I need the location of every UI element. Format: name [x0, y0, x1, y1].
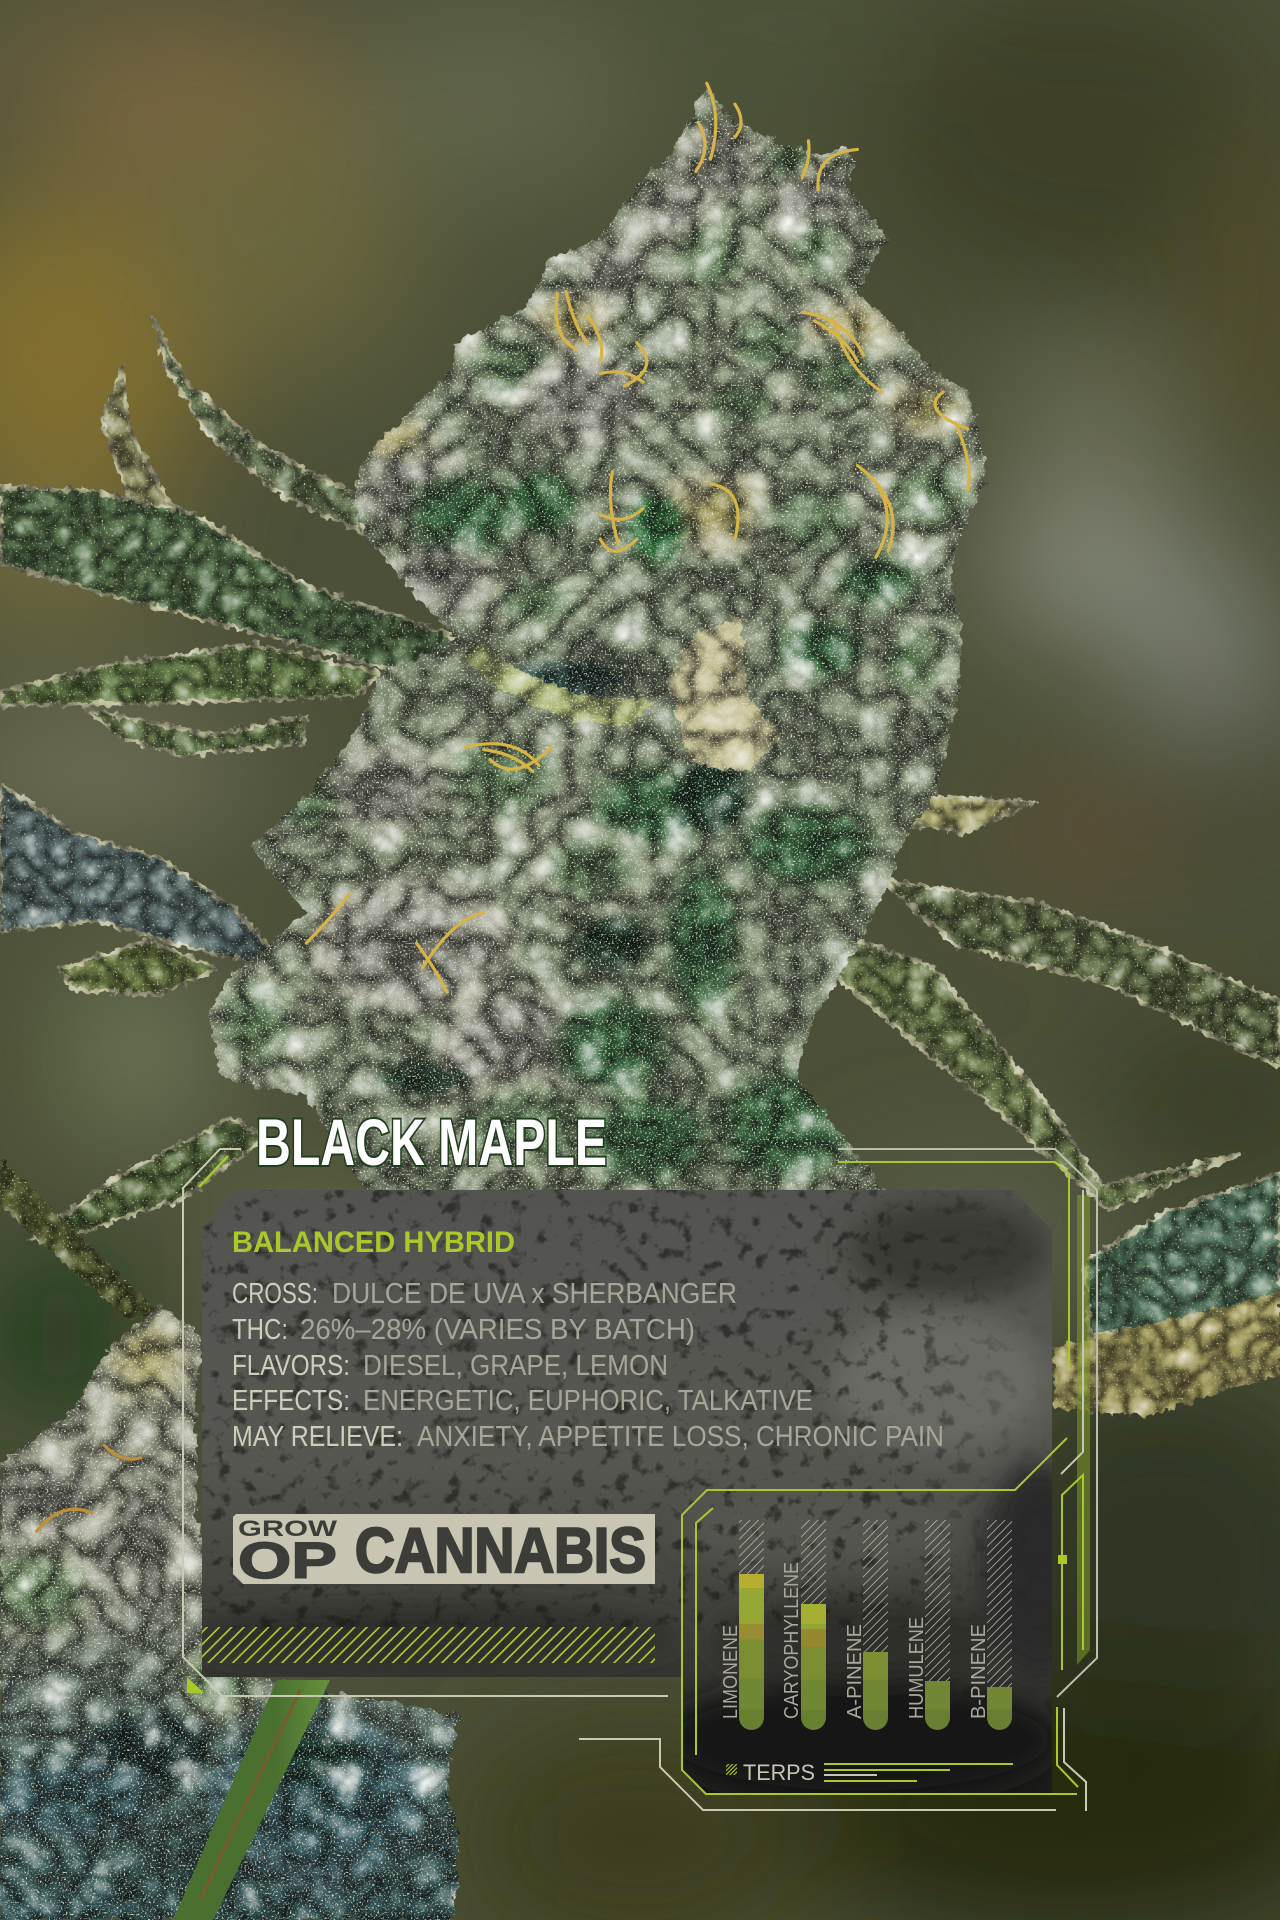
spec: flavors: DIESEL, GRAPE, LEMON — [363, 1350, 668, 1382]
strain name title: BLACK MAPLE — [256, 1105, 607, 1179]
bud: soft calyx tones — [206, 125, 984, 1188]
leaf: dark left blue — [0, 784, 288, 968]
leaf: upper left frond — [153, 316, 364, 533]
photo: main bud — [196, 73, 1004, 1200]
hud frame lines — [183, 1149, 1097, 1811]
bar: b-pinene — [968, 1520, 1012, 1730]
terps legend — [726, 1760, 1013, 1785]
leaf: lower right drooping — [747, 904, 1240, 1210]
lower bud stem — [173, 1680, 330, 1920]
branch: left — [0, 1158, 159, 1320]
logo: grow op cannabis: CANNABIS — [355, 1516, 646, 1586]
spec: flavors — [232, 1350, 668, 1382]
leaf: mid left fan — [0, 644, 380, 706]
strain type heading: BALANCED HYBRID — [232, 1226, 515, 1259]
spec: thc: THC: — [232, 1314, 288, 1346]
leaf: right fan — [882, 879, 1280, 1068]
spec: effects: EFFECTS: — [232, 1385, 350, 1417]
photo: leaves behind the bud — [0, 316, 1280, 1416]
bar: humulene — [906, 1520, 950, 1730]
leaf: long lower left tip — [31, 1117, 263, 1240]
bar: humulene: HUMULENE — [906, 1617, 928, 1719]
bar: b-pinene: B-PINENE — [968, 1624, 990, 1719]
photo: lower left bud — [0, 1298, 465, 1920]
bar: caryophyllene: CARYOPHYLLENE — [781, 1562, 803, 1719]
logo: grow op cannabis: GROW — [238, 1516, 337, 1541]
leaf: bright tip — [784, 762, 1036, 833]
bar: limonene — [720, 1520, 764, 1730]
spec: thc: 26%–28% (VARIES BY BATCH) — [300, 1314, 695, 1346]
bar: limonene: LIMONENE — [720, 1625, 742, 1719]
terps legend: TERPS — [743, 1760, 815, 1785]
spec: may relieve: MAY RELIEVE: — [232, 1421, 403, 1453]
spec: may relieve — [232, 1421, 944, 1453]
bar: a-pinene: A-PINENE — [844, 1624, 866, 1719]
info panel — [180, 1190, 1100, 1800]
bud: curled bract — [459, 643, 655, 726]
spec: flavors: FLAVORS: — [232, 1350, 350, 1382]
spec: cross: DULCE DE UVA x SHERBANGER — [332, 1278, 737, 1310]
logo: grow op cannabis: OP — [238, 1532, 337, 1589]
leaf: small lower left — [59, 941, 218, 995]
hazard hatch stripe — [202, 1627, 655, 1663]
terpene bar chart — [720, 1520, 1012, 1730]
bar: a-pinene — [844, 1520, 888, 1730]
leaf: far right yellow — [1053, 1292, 1280, 1416]
leaf: far right green — [1084, 1173, 1280, 1338]
leaf: large left fan — [0, 488, 456, 680]
bud: pale lower calyx — [668, 619, 784, 772]
bar: caryophyllene — [781, 1520, 826, 1730]
spec: cross: CROSS: — [232, 1278, 318, 1310]
leaf: small left frond — [83, 708, 304, 756]
spec: effects: ENERGETIC, EUPHORIC, TALKATIVE — [363, 1385, 813, 1417]
leaf: curled left frond — [103, 365, 251, 603]
logo: grow op cannabis — [233, 1514, 655, 1589]
spec: may relieve: ANXIETY, APPETITE LOSS, CHRONIC PAIN — [417, 1421, 944, 1453]
bud: amber pistils — [37, 83, 969, 1531]
